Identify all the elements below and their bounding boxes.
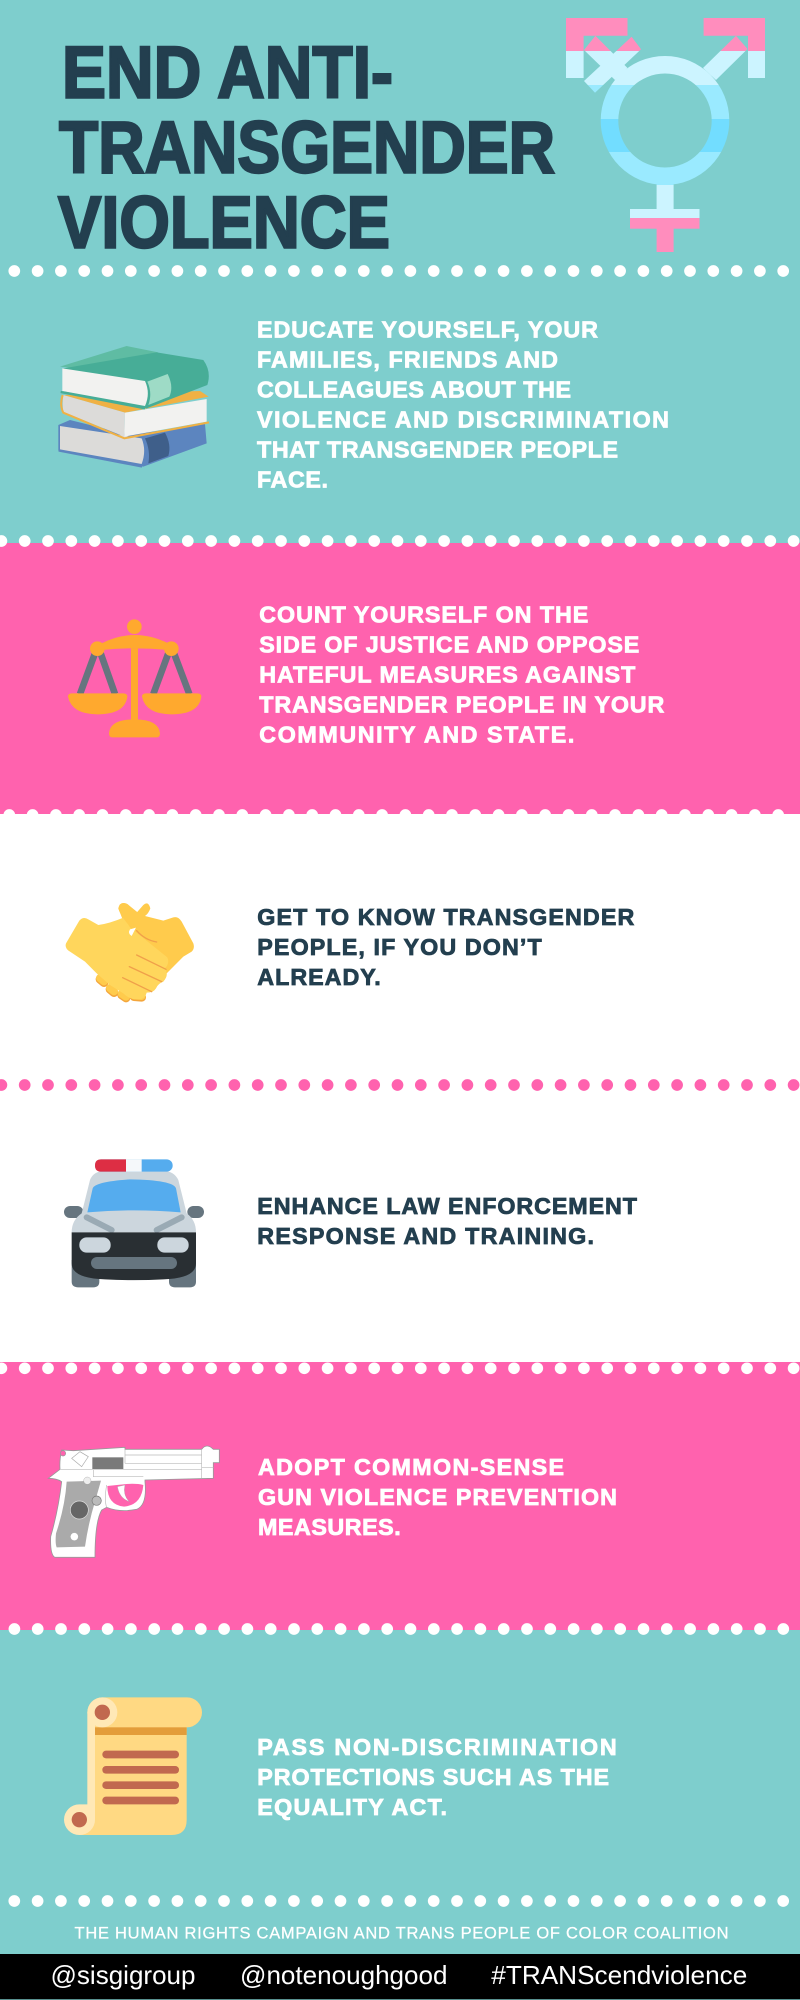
text block: enhance law enforcement: RESPONSE AND TRAINING. (257, 1223, 594, 1249)
panel: pink justice section (0, 543, 800, 814)
text block: pass non-discrimination (257, 1734, 617, 1820)
text block: pass non-discrimination: PASS NON-DISCRIMINATION (257, 1734, 617, 1760)
panel: black social handles footer (0, 1954, 800, 1999)
panel: teal header and educate section (0, 0, 800, 543)
icon: transgender symbol (566, 18, 765, 252)
text block: count yourself: COMMUNITY AND STATE. (259, 722, 574, 748)
title: TRANSGENDER (59, 108, 555, 188)
text block: get to know (257, 904, 634, 990)
title: VIOLENCE (58, 182, 390, 264)
text block: educate yourself: VIOLENCE AND DISCRIMINATION (257, 407, 669, 433)
title: END ANTI- (62, 32, 393, 114)
icon: handshake (66, 903, 194, 999)
text block: educate yourself (257, 317, 669, 493)
icon: police car (64, 1159, 204, 1287)
text block: count yourself: SIDE OF JUSTICE AND OPPOSE (259, 632, 639, 658)
text block: educate yourself: THAT TRANSGENDER PEOPLE (257, 437, 618, 463)
text block: count yourself: TRANSGENDER PEOPLE IN YOUR (259, 692, 664, 718)
text block: adopt common-sense: GUN VIOLENCE PREVENTION (258, 1484, 617, 1510)
icon: stack of books (58, 346, 209, 467)
text block: educate yourself: COLLEAGUES ABOUT THE (257, 377, 571, 403)
text block: count yourself: HATEFUL MEASURES AGAINST (259, 662, 635, 688)
icon: paper scroll (64, 1697, 202, 1835)
text block: adopt common-sense: ADOPT COMMON-SENSE (258, 1454, 564, 1480)
text block: enhance law enforcement: ENHANCE LAW ENFORCEMENT (257, 1193, 637, 1219)
panel: white know and law enforcement sections (0, 814, 800, 1362)
text block: pass non-discrimination: PROTECTIONS SUCH AS THE (257, 1764, 609, 1790)
text block: enhance law enforcement (257, 1193, 637, 1249)
text block: get to know: GET TO KNOW TRANSGENDER (257, 904, 634, 930)
icon: handgun (48, 1446, 219, 1557)
text block: educate yourself: FACE. (257, 467, 328, 493)
social handle: sisgigroup: @sisgigroup (50, 1962, 196, 1990)
social handle: notenoughgood: @notenoughgood (240, 1962, 448, 1990)
text block: educate yourself: FAMILIES, FRIENDS AND (257, 347, 558, 373)
text block: get to know: PEOPLE, IF YOU DON’T (257, 934, 542, 960)
text block: count yourself (259, 602, 664, 748)
text block: educate yourself: EDUCATE YOURSELF, YOUR (257, 317, 598, 343)
text block: adopt common-sense (258, 1454, 617, 1540)
text block: pass non-discrimination: EQUALITY ACT. (257, 1794, 447, 1820)
text block: get to know: ALREADY. (257, 964, 381, 990)
panel: teal non-discrimination section (0, 1630, 800, 1954)
social hashtag: TRANScendviolence: #TRANScendviolence (491, 1962, 747, 1990)
footer credit line: THE HUMAN RIGHTS CAMPAIGN AND TRANS PEOPLE OF COLOR COALITION (74, 1925, 728, 1943)
text block: count yourself: COUNT YOURSELF ON THE (259, 602, 588, 628)
text block: adopt common-sense: MEASURES. (258, 1514, 401, 1540)
icon: scales of justice (68, 619, 201, 737)
panel: pink gun violence section (0, 1362, 800, 1630)
title (58, 32, 555, 264)
